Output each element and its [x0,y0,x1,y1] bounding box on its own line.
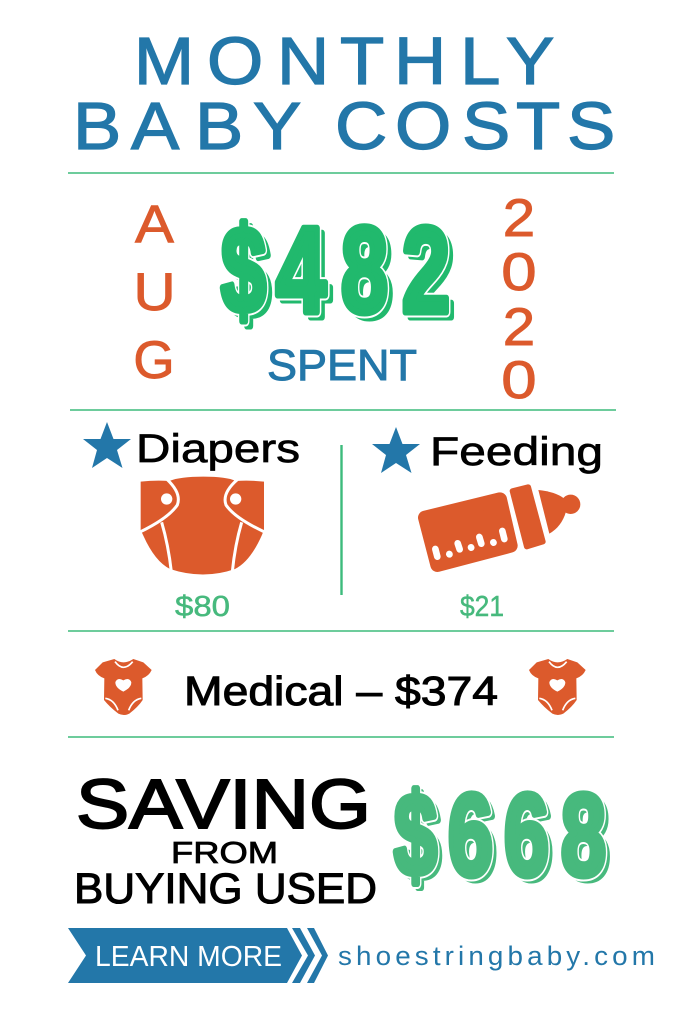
icon: onesie right [529,659,586,715]
spent label: SPENT [267,341,417,390]
vertical month label: AUG: A [135,194,175,253]
savings amount: $668: 8 [561,770,606,900]
savings text: SAVING [76,765,371,843]
icon: star [83,422,131,468]
title: COSTS [335,88,615,163]
total spent amount: $482: 4 [276,202,326,338]
savings amount: $668: 6 [448,770,493,900]
diapers amount: $80 [175,591,230,623]
savings amount: $668: 8 [565,774,610,904]
icon: diaper [139,477,265,574]
vertical month label: AUG: U [133,262,176,321]
savings amount: $668: 6 [504,770,549,900]
vertical month label: AUG [133,194,176,390]
total spent amount: $482: 4 [276,202,326,338]
savings amount: $668: 6 [448,770,493,900]
savings text [74,765,377,913]
panel: medical [95,659,586,715]
total spent amount: $482: 2 [402,202,450,338]
total spent amount: $482: 8 [346,207,393,343]
vertical year label: 2020: 2 [503,297,535,356]
title [73,23,615,163]
savings amount: $668: $ [394,770,437,900]
title: MONTHLY [134,23,554,98]
total spent amount: $482: $ [226,207,271,343]
website url: shoestringbaby.com [338,941,659,971]
panel: feeding [372,427,603,623]
savings amount: $668: $ [398,774,441,904]
feeding heading: Feeding [430,430,603,474]
title: BABY [73,88,301,163]
savings amount: $668: 8 [561,770,606,900]
feeding amount: $21 [460,591,504,623]
learn more arrow button [68,928,328,983]
diapers heading: Diapers [136,427,300,471]
savings text: FROM [171,835,278,870]
vertical year label: 2020: 0 [501,243,537,302]
total spent amount: $482: $ [221,202,266,338]
savings amount: $668 [394,770,610,904]
vertical year label: 2020 [501,188,537,410]
total spent amount: $482 [221,202,455,343]
savings amount: $668: 6 [508,774,553,904]
icon: star [372,427,420,473]
total spent amount: $482: 2 [402,202,450,338]
learn more arrow button: LEARN MORE [95,941,282,973]
vertical month label: AUG: G [133,331,175,390]
savings text: BUYING USED [74,865,377,913]
total spent amount: $482: 4 [281,207,331,343]
total spent amount: $482: $ [221,202,266,338]
panel: diapers [83,422,300,623]
medical label: Medical – $374 [184,668,498,714]
total spent amount: $482: 2 [407,207,455,343]
savings amount: $668: 6 [452,774,497,904]
savings amount: $668: $ [394,770,437,900]
vertical year label: 2020: 2 [503,188,535,247]
savings amount: $668: 6 [504,770,549,900]
vertical year label: 2020: 0 [501,351,537,410]
total spent amount: $482: 8 [341,202,388,338]
total spent amount: $482: 8 [341,202,388,338]
icon: baby bottle [425,487,580,565]
icon: onesie left [95,659,152,715]
